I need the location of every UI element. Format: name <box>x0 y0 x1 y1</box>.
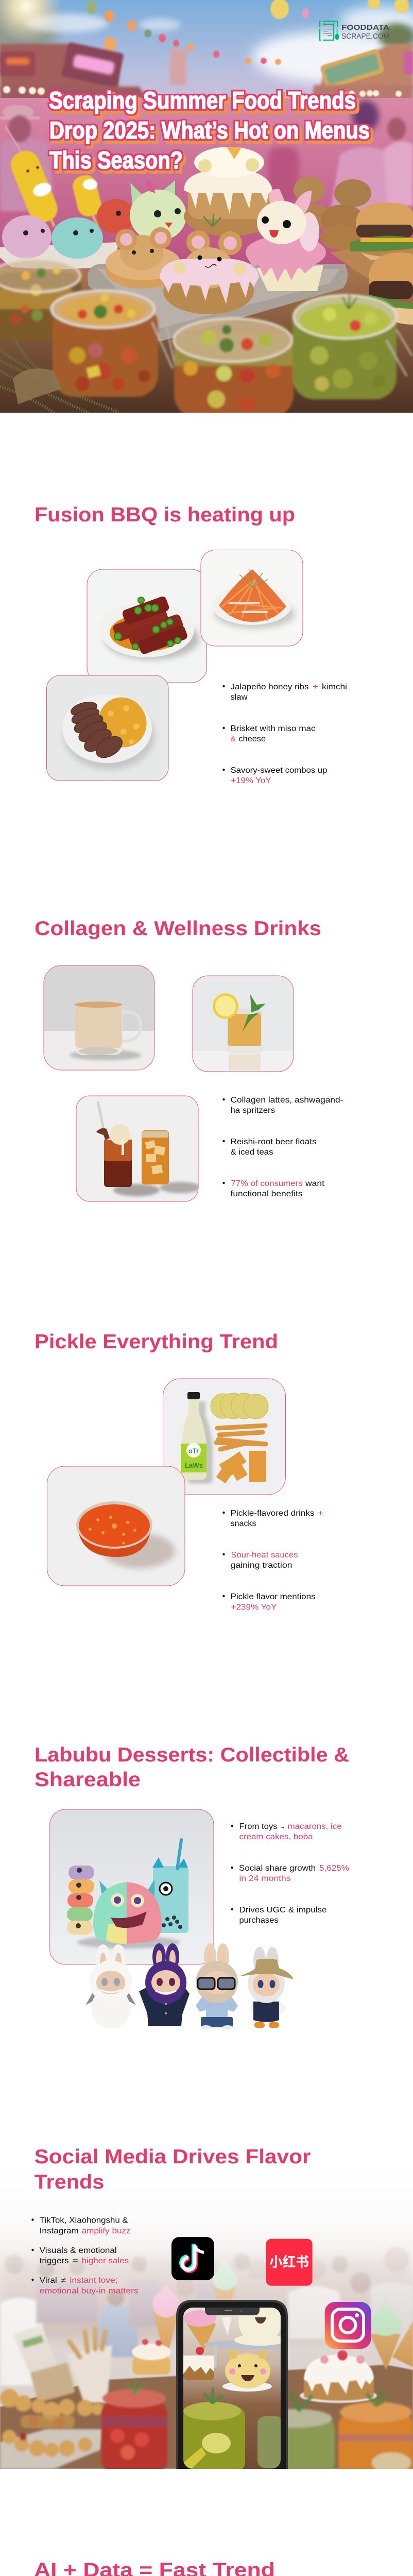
bullet: toys to desserts: From toys <box>239 1822 278 1831</box>
bullet: platforms: Instagram <box>40 2227 79 2235</box>
bullet: combos: +19% YoY <box>231 776 271 785</box>
stacked buns and burgers <box>294 177 413 325</box>
labubu figure: purple hood <box>139 1943 190 2026</box>
bullet: pickle drinks: + <box>318 1509 323 1518</box>
bullet: sour-heat sauces: Sour-heat sauces <box>231 1551 298 1560</box>
heading: Fusion BBQ is heating up <box>35 504 295 526</box>
bullet: consumers stat <box>222 1179 325 1198</box>
photo: monster desserts <box>50 1809 214 1964</box>
bullet: platforms: amplify buzz <box>82 2227 131 2235</box>
bullet: brisket: cheese <box>239 735 266 743</box>
bullet: pickle drinks: Pickle-flavored drinks <box>231 1509 315 1518</box>
metal tray <box>88 264 348 341</box>
bullet: mentions stat <box>222 1592 316 1612</box>
bullet: social share growth: 5,625% <box>319 1864 349 1873</box>
bullet: reishi: Reishi-root beer floats <box>231 1138 317 1146</box>
bullet: mentions stat: +239% YoY <box>231 1603 277 1612</box>
bullet: toys to desserts: cream cakes, boba <box>239 1833 313 1841</box>
phone mockup <box>176 2298 301 2471</box>
icon: Instagram <box>325 2302 371 2349</box>
bullet: toys to desserts <box>231 1822 342 1841</box>
bullet: UGC: Drives UGC & impulse <box>239 1906 326 1914</box>
bullet: visuals: Visuals & emotional <box>40 2246 117 2255</box>
bullet: ribs: slaw <box>231 693 248 702</box>
bullet: lattes: Collagen lattes, ashwagand- <box>231 1096 343 1105</box>
cakes <box>132 2339 377 2403</box>
top right logo: SCRAPE.COM <box>341 32 389 41</box>
food sign and fries cup <box>13 2325 112 2403</box>
bullet: brisket: & <box>231 735 236 743</box>
bullet: platforms <box>31 2216 131 2235</box>
bullet: viral: emotional buy-in matters <box>40 2286 139 2296</box>
bullet: viral: instant love; <box>70 2276 117 2285</box>
panel: pickle everything <box>35 1331 323 1612</box>
bullet: pickle drinks <box>222 1509 323 1528</box>
pink iced donut <box>160 247 259 314</box>
panel: labubu desserts <box>35 1744 349 2029</box>
icon: Xiaohongshu: 小红书 <box>269 2251 309 2271</box>
bullet: mentions stat: Pickle flavor mentions <box>231 1592 316 1601</box>
bullet: reishi <box>222 1138 317 1157</box>
hero image: summer food festival <box>0 0 413 417</box>
soft serve cones <box>152 2258 413 2370</box>
photo: collagen latte <box>44 965 154 1070</box>
heading: Trends <box>34 2171 104 2193</box>
panel: fusion BBQ <box>35 504 347 785</box>
bullet: combos <box>222 766 328 785</box>
white fade over photo <box>0 2164 413 2365</box>
bullet: ribs <box>222 683 347 702</box>
bullet: ribs: kimchi <box>322 683 347 691</box>
top right logo <box>319 21 389 41</box>
kawaii cookies <box>106 214 242 289</box>
heading: Labubu Desserts: Collectible & <box>35 1744 349 1766</box>
bullet: consumers stat: functional benefits <box>231 1190 303 1198</box>
sun and clouds <box>0 0 413 82</box>
booths <box>0 42 413 116</box>
phone screen: kawaii bear dessert <box>222 2350 272 2392</box>
bullet: viral <box>31 2276 139 2296</box>
heading: Shareable <box>35 1769 141 1791</box>
background photo: food festival crowd <box>0 2234 413 2469</box>
mochi row <box>0 178 186 269</box>
photo: kimchi slaw <box>201 550 303 646</box>
bullet: toys to desserts: macarons, ice <box>288 1822 342 1831</box>
phone screen: animal mochi on stand <box>203 2298 301 2367</box>
bullet: combos: Savory-sweet combos up <box>231 766 328 775</box>
rosemary bundle <box>0 340 118 415</box>
photo: ashwagandha spritzer <box>193 976 294 1072</box>
labubu figure: bucket hat <box>239 1947 294 2028</box>
photo: jalapeño ribs <box>87 569 207 683</box>
heading <box>34 2146 311 2193</box>
icon: Xiaohongshu <box>266 2239 313 2286</box>
bullet: pickle drinks: snacks <box>231 1519 256 1528</box>
labubu figure: white <box>85 1944 136 2029</box>
bullet: lattes: ha spritzers <box>231 1106 275 1115</box>
icon: TikTok <box>171 2237 214 2280</box>
top right logo: FOODDATA <box>341 23 389 32</box>
tall drip cake <box>184 147 274 236</box>
bullet: brisket: Brisket with miso mac <box>231 724 316 733</box>
bullet: sour-heat sauces: gaining traction <box>231 1561 292 1570</box>
panel: collagen and wellness drinks <box>35 918 343 1201</box>
bullet: viral: Viral <box>40 2276 57 2285</box>
bullet: sour-heat sauces <box>222 1551 298 1570</box>
bullet: consumers stat: 77% of consumers <box>231 1179 303 1188</box>
heading: Collagen & Wellness Drinks <box>35 918 321 940</box>
phone screen: cake <box>183 2347 214 2380</box>
bullet: toys to desserts: → <box>280 1822 285 1831</box>
bullet: reishi: & iced teas <box>231 1148 273 1157</box>
photo: pickle drink and snacks: LaWs <box>185 1461 203 1470</box>
bullet: viral: ≠ <box>61 2276 66 2285</box>
labubu figure: glasses <box>196 1943 238 2029</box>
bullet: visuals <box>31 2246 129 2265</box>
crowd <box>0 98 413 273</box>
bullet: visuals: higher sales <box>82 2257 129 2265</box>
phone screen: soft serve <box>183 2310 216 2350</box>
hero title: Scraping Summer Food Trends <box>49 87 356 114</box>
phone screen: pickle jar <box>183 2388 283 2471</box>
bullet: platforms: TikTok, Xiaohongshu & <box>40 2216 128 2225</box>
photo: pickle drink and snacks <box>163 1379 285 1495</box>
photo: reishi float and iced tea <box>76 1096 201 1201</box>
bullet: social share growth: in 24 months <box>239 1874 291 1883</box>
photo: sour-heat sauce bowl <box>47 1466 185 1586</box>
hero title <box>49 87 370 174</box>
heading <box>35 1744 349 1791</box>
bullet: ribs: + <box>313 683 318 691</box>
pickle jars <box>0 259 412 417</box>
bullet: visuals: = <box>73 2257 78 2265</box>
bunny cupcake <box>246 189 326 291</box>
jars <box>101 2379 413 2476</box>
balloons <box>87 0 409 65</box>
bullet: brisket <box>222 724 316 743</box>
wooden table <box>0 268 413 413</box>
bullet: ribs: Jalapeño honey ribs <box>231 683 309 691</box>
photo: brisket with mac and cheese <box>46 675 168 781</box>
bullet: social share growth: Social share growth <box>239 1864 316 1873</box>
bullet: visuals: triggers <box>40 2257 69 2265</box>
panel: social media scene <box>0 2146 413 2476</box>
skewers plate <box>0 2389 104 2469</box>
bullet: consumers stat: want <box>305 1179 325 1188</box>
hero title: This Season? <box>49 146 183 174</box>
bullet: UGC: purchases <box>239 1916 279 1925</box>
heading: Social Media Drives Flavor <box>34 2146 311 2168</box>
bullet: UGC <box>231 1906 326 1925</box>
heading: Pickle Everything Trend <box>35 1331 278 1353</box>
photo: pickle drink and snacks: oTr <box>188 1447 199 1455</box>
wooden counter <box>0 2365 413 2469</box>
bullet: social share growth <box>231 1864 349 1883</box>
corn dogs <box>5 126 104 227</box>
bullet: lattes <box>222 1096 343 1115</box>
